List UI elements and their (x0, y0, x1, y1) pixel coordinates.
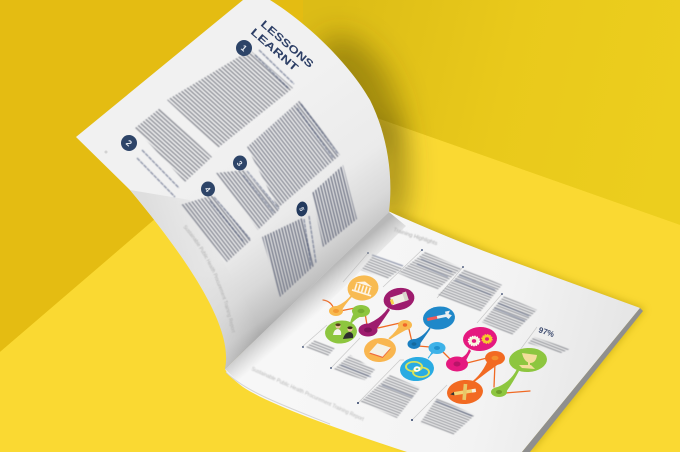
panel: lower right page (225, 211, 643, 452)
icon: wrench and pencil (426, 310, 453, 323)
text: lesson 4 body (180, 195, 251, 262)
lesson 3 upper text (247, 100, 340, 208)
heading: training highlights: Training Highlights (392, 227, 438, 247)
shadow: lower page on floor (232, 211, 645, 451)
text block: below people (302, 325, 335, 356)
background: left wall (0, 0, 303, 352)
lesson 5: 5 (297, 206, 305, 212)
icon: book (368, 343, 392, 358)
chart node: knot circle and pin (399, 342, 446, 382)
icon: trophy (519, 353, 537, 369)
icon: document (389, 291, 409, 306)
icon: gears (468, 335, 492, 346)
text: lesson 3 body (216, 170, 279, 230)
chart node: gears circle and pin (446, 326, 498, 372)
text block: above gears (477, 293, 537, 335)
icon: people (333, 323, 353, 339)
icon: pencil and ruler (449, 382, 477, 402)
lesson 5 upper text (312, 165, 357, 247)
text block: above document (383, 249, 462, 290)
page thickness edge (522, 308, 643, 452)
connector lines: orange path (323, 300, 530, 393)
lesson 2 (121, 108, 212, 197)
chart node: trophy circle and pin (491, 347, 548, 397)
chart node: document circle and pin (358, 285, 416, 336)
lesson 4 (180, 182, 251, 262)
text: lesson 2 body (135, 108, 212, 182)
lesson 3 (216, 156, 279, 230)
chart node: book circle and pin (363, 320, 412, 364)
lesson 4: 4 (203, 185, 213, 194)
stat: 97% (520, 325, 570, 353)
lesson 5 (262, 201, 316, 297)
lesson 1: 1 (239, 43, 249, 54)
chart node: pencil circle and pin (446, 351, 505, 406)
lesson 3: 3 (235, 159, 244, 168)
text block: above wrench (437, 266, 502, 312)
text block: below pencil (411, 385, 475, 435)
footer: lower page title: Sustainable Public Health Procurement Training Report (250, 366, 365, 423)
text block: below book (330, 338, 375, 380)
text block: above building (343, 252, 403, 282)
small folio dot (104, 150, 108, 154)
text: lesson 5 body (262, 218, 315, 297)
chart node: building circle and pin (329, 273, 380, 316)
stat: 97%: 97% (537, 325, 555, 339)
heading: lessons learnt: LESSONS (258, 18, 316, 71)
page sheets fold (226, 372, 330, 424)
icon: building (352, 279, 375, 297)
text: lesson 1 body (167, 50, 293, 148)
panel: upper curled page (76, 0, 390, 369)
heading: lessons learnt: LEARNT (248, 26, 301, 74)
shadow: cast by lifted page (299, 21, 417, 230)
lesson 1 (167, 40, 294, 148)
background: right wall (303, 0, 680, 225)
footer: upper page title: Sustainable Public Health Procurement Training Report (184, 225, 235, 332)
spine shadow on lower page (225, 212, 406, 387)
heading: lessons learnt (248, 18, 316, 74)
text block: below knot (357, 360, 420, 418)
icon: knot (406, 362, 429, 377)
background: floor (0, 92, 680, 452)
chart node: wrench circle and pin (408, 305, 456, 349)
chart node: people circle and pin (324, 305, 370, 345)
lesson 2: 2 (124, 138, 134, 149)
